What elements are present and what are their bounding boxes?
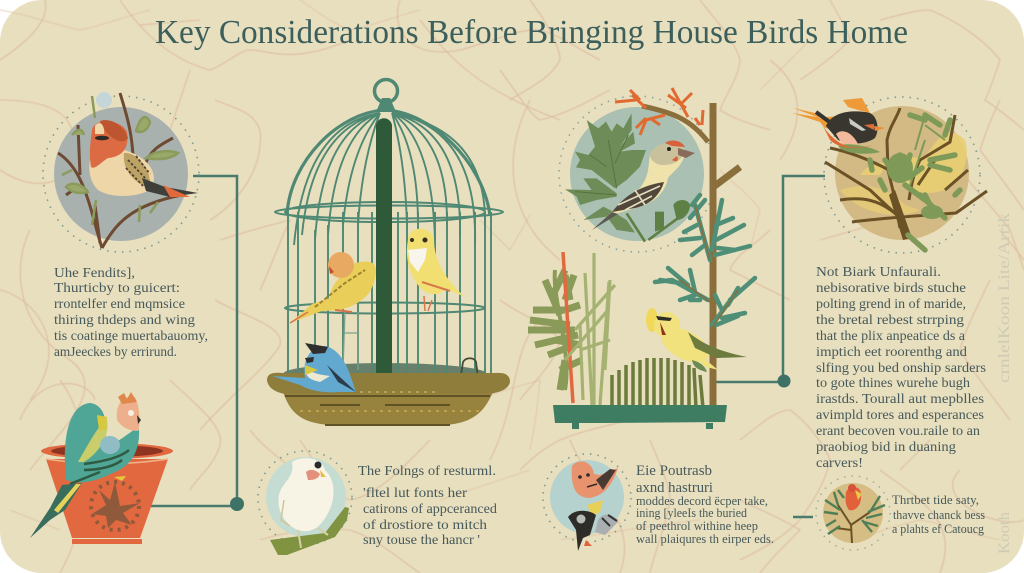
text block: bottom center left xyxy=(358,464,497,548)
cage hanging ring xyxy=(374,80,398,112)
icon: birdcage xyxy=(267,80,510,425)
icon: stacked birds xyxy=(543,454,631,551)
text block: right: Not Biark Unfaurali. xyxy=(816,265,941,280)
text block: bottom center right: axnd hastruri xyxy=(636,480,713,496)
yellow budgie xyxy=(646,308,747,372)
text block: right: nebisorative birds stuche xyxy=(816,281,966,296)
blue bird xyxy=(272,343,356,392)
cage floor xyxy=(283,363,487,385)
text block: right: the bretal rebest strrping xyxy=(816,313,964,328)
cage central column xyxy=(376,118,392,383)
text block: right: carvers! xyxy=(816,456,863,471)
text block: bottom center left: 'fltel lut fonts her xyxy=(363,486,467,501)
text block: right: erant becoven vou.raile to an xyxy=(816,424,980,439)
right connector line xyxy=(716,176,825,382)
text block: right: to gote thines wurehe bugh xyxy=(816,376,970,391)
left connector dot xyxy=(230,497,244,511)
text block: left: tis coatinge muertabauomy, xyxy=(54,329,208,344)
text block: right: slfing you bed onship sarders xyxy=(816,361,986,376)
cage dome wires xyxy=(287,110,490,215)
text block: right: polting grend in of maride, xyxy=(816,297,966,312)
title: Key Considerations Before Bringing House Birds Home xyxy=(155,14,908,51)
finch xyxy=(592,140,695,230)
text block: left: thiring thdeps and wing xyxy=(54,313,195,328)
cage vertical bars xyxy=(288,212,491,380)
green leaves xyxy=(565,113,690,242)
text block: bottom center left: sny touse the hancr ' xyxy=(363,533,480,548)
text block: bottom center right: of peethrol withine heep xyxy=(636,518,758,533)
perch ladder xyxy=(343,310,358,370)
trunk and branches xyxy=(712,103,740,405)
text block: bottom center left: The Folngs of resturml. xyxy=(358,464,496,479)
text block: bottom center right: wall plaiqures th eirper eds. xyxy=(636,531,774,546)
cage base bowl xyxy=(267,373,510,425)
text block: right: imptich eet roorenthg and xyxy=(816,345,967,360)
text block: bottom center left: catirons of appceranced xyxy=(363,502,497,517)
branches xyxy=(825,108,987,228)
green grass xyxy=(565,253,615,405)
text block: bottom center left: of drostiore to mitch xyxy=(363,518,487,533)
teal fern branches xyxy=(655,195,755,325)
icon: finch in medallion with tree xyxy=(528,88,755,429)
comb-like plant xyxy=(612,358,703,408)
vertical watermark top: crnlelKoon Lite/Arrik xyxy=(996,213,1013,383)
left connector line xyxy=(150,176,237,506)
text block: bottom right: thavve chanck bess xyxy=(893,507,985,522)
orange bird xyxy=(290,252,376,323)
red twigs xyxy=(615,88,703,135)
text block: bottom right: a plahts ef Catoucg xyxy=(892,521,984,536)
icon: redstart on yellow medallion xyxy=(792,97,987,253)
text block: bottom center right: ining [yleeIs the buried xyxy=(636,505,747,520)
icon: parakeet on flower pot xyxy=(30,392,173,544)
text block: bottom center right xyxy=(636,463,774,546)
text block: bottom center right: moddes decord ëcper take, xyxy=(636,493,768,508)
olive fern xyxy=(528,270,582,390)
text block: right xyxy=(816,265,986,471)
cage hook xyxy=(461,358,478,377)
text block: right: avimpld tores and esperances xyxy=(816,408,984,423)
text block: left xyxy=(54,266,208,360)
text block: left: Thurticby to guicert: xyxy=(54,281,180,296)
orange stake xyxy=(563,252,573,403)
vertical watermark bottom: Kooth xyxy=(996,512,1013,554)
text block: left: Uhe Fendits], xyxy=(54,266,135,281)
icon: small red bird on sprig xyxy=(816,476,890,550)
leaves xyxy=(870,115,960,250)
text block: bottom right xyxy=(892,492,985,536)
right connector dot xyxy=(778,374,790,388)
text block: right: irastds. Tourall aut mepblles xyxy=(816,392,984,407)
yellow bird xyxy=(407,229,465,311)
icon: robin on branches xyxy=(43,92,199,252)
text block: left: rrontelfer end mqmsice xyxy=(54,297,185,312)
bird xyxy=(792,98,885,148)
text block: right: that the plix anpeatice ds a xyxy=(816,329,966,344)
stand base xyxy=(553,405,727,429)
small right connector xyxy=(793,516,813,518)
text block: left: amJeeckes by errirund. xyxy=(54,345,177,360)
text block: right: praobiog bid in duaning xyxy=(816,440,956,455)
icon: white bird on branch xyxy=(258,451,352,555)
cage rings xyxy=(275,202,503,314)
text block: bottom center right: Eie Poutrasb xyxy=(636,463,712,479)
text block: bottom right: Thrtbet tide saty, xyxy=(892,492,979,507)
